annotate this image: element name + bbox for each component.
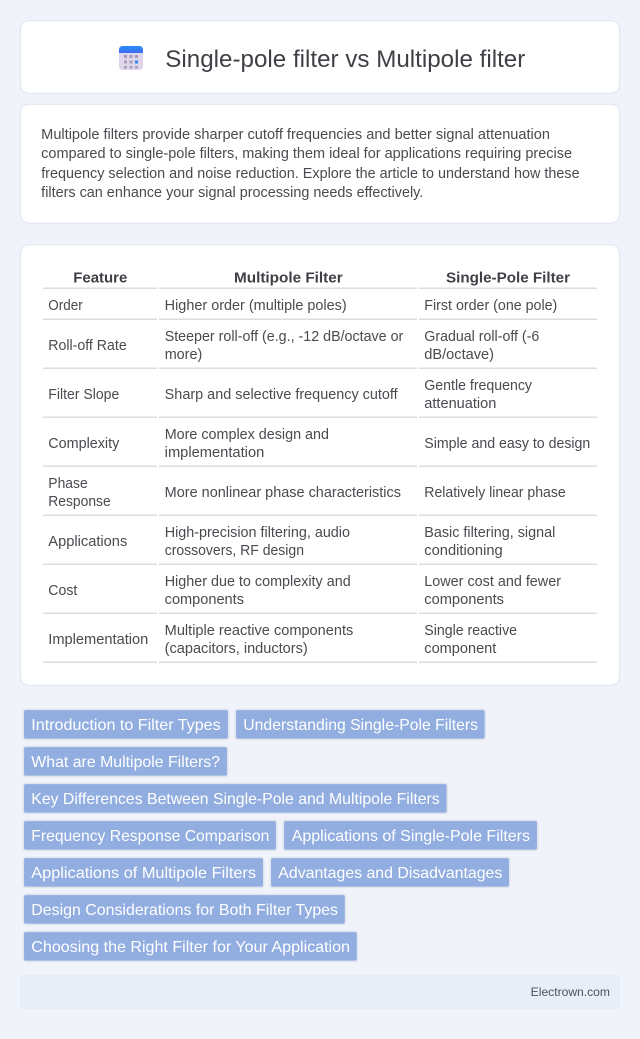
row: complexity: implementation	[165, 445, 264, 461]
row: implementation: Single reactive	[424, 623, 517, 639]
row: complexity: More complex design and	[165, 427, 329, 443]
table header row: Single-Pole Filter	[446, 270, 570, 286]
tag: applications multipole: Applications of Multipole Filters	[31, 865, 256, 882]
row: complexity	[48, 427, 590, 461]
icon: calendar grid	[119, 46, 143, 70]
row: applications: conditioning	[424, 543, 503, 559]
tag: advantages: Advantages and Disadvantages	[278, 865, 502, 882]
tag: design considerations	[23, 894, 346, 924]
row: phase response	[48, 476, 566, 510]
intro paragraph: filters can enhance your signal processing needs effectively.	[41, 185, 423, 201]
table header row: Feature	[73, 270, 127, 286]
intro paragraph: Multipole filters provide sharper cutoff frequencies and better signal attenuation	[41, 127, 550, 143]
row: applications: Applications	[48, 534, 127, 550]
row: order: Higher order (multiple poles)	[165, 298, 347, 314]
tag: key differences: Key Differences Between Single-Pole and Multipole Filters	[31, 791, 440, 808]
title: Single-pole filter vs Multipole filter	[165, 46, 525, 73]
tag: design considerations: Design Considerations for Both Filter Types	[31, 902, 338, 919]
intro paragraph: compared to single-pole filters, making them ideal for applications requiring precise	[41, 146, 572, 162]
row: implementation: Implementation	[48, 632, 148, 648]
row: order: Order	[48, 298, 83, 314]
row: phase response: Response	[48, 494, 111, 510]
intro paragraph: frequency selection and noise reduction. Explore the article to understand how these	[41, 166, 580, 182]
row: roll-off rate: Steeper roll-off (e.g., -12 dB/octave or	[165, 329, 403, 345]
tag: advantages	[270, 857, 510, 887]
row: roll-off rate: more)	[165, 347, 202, 363]
tag: frequency response: Frequency Response Comparison	[31, 828, 269, 845]
row: order: First order (one pole)	[424, 298, 557, 314]
tag: what are multipole: What are Multipole Filters?	[31, 754, 220, 771]
row: applications: High-precision filtering, audio	[165, 525, 350, 541]
tag: applications single-pole	[283, 820, 538, 850]
tag: frequency response	[23, 820, 277, 850]
tag: understanding single-pole	[235, 709, 485, 739]
row: cost: components	[424, 592, 504, 608]
tag: applications multipole	[23, 857, 264, 887]
panel: comparison table	[20, 245, 620, 685]
footer	[20, 975, 620, 1009]
table header row	[73, 270, 570, 286]
row: filter slope: Filter Slope	[48, 387, 119, 403]
row: roll-off rate: Roll-off Rate	[48, 338, 127, 354]
row: roll-off rate: dB/octave)	[424, 347, 494, 363]
tag: introduction: Introduction to Filter Types	[31, 717, 221, 734]
row: filter slope	[48, 378, 533, 412]
footer credit: Electrown.com	[531, 985, 610, 999]
row: implementation	[48, 623, 517, 657]
panel: title header	[20, 21, 620, 93]
row: filter slope: Gentle frequency	[424, 378, 533, 394]
row: implementation: component	[424, 641, 496, 657]
tag: understanding single-pole: Understanding Single-Pole Filters	[243, 717, 478, 734]
row: roll-off rate: Gradual roll-off (-6	[424, 329, 539, 345]
row: roll-off rate	[48, 329, 539, 363]
row: filter slope: Sharp and selective frequency cutoff	[165, 387, 399, 403]
row: order	[48, 298, 557, 314]
tag: key differences	[23, 783, 447, 813]
row: cost: Higher due to complexity and	[165, 574, 351, 590]
tag: what are multipole	[23, 746, 228, 776]
tag: introduction	[23, 709, 229, 739]
tag: applications single-pole: Applications of Single-Pole Filters	[292, 828, 530, 845]
row: cost	[48, 574, 561, 608]
row: applications	[48, 525, 555, 559]
row: cost: components	[165, 592, 244, 608]
row: implementation: Multiple reactive components	[165, 623, 353, 639]
tag: choosing the right filter: Choosing the Right Filter for Your Application	[31, 939, 350, 956]
row: implementation: (capacitors, inductors)	[165, 641, 308, 657]
row: cost: Cost	[48, 583, 77, 599]
row: complexity: Simple and easy to design	[424, 436, 590, 452]
tag: choosing the right filter	[23, 931, 358, 961]
topic tags	[23, 709, 538, 961]
row: phase response: More nonlinear phase characteristics	[165, 485, 401, 501]
row: applications: Basic filtering, signal	[424, 525, 555, 541]
row: filter slope: attenuation	[424, 396, 496, 412]
row: phase response: Relatively linear phase	[424, 485, 566, 501]
row: complexity: Complexity	[48, 436, 120, 452]
intro paragraph	[41, 127, 580, 201]
row: cost: Lower cost and fewer	[424, 574, 561, 590]
panel: introduction	[20, 104, 620, 223]
row: applications: crossovers, RF design	[165, 543, 304, 559]
row: phase response: Phase	[48, 476, 88, 492]
table header row: Multipole Filter	[234, 270, 343, 286]
